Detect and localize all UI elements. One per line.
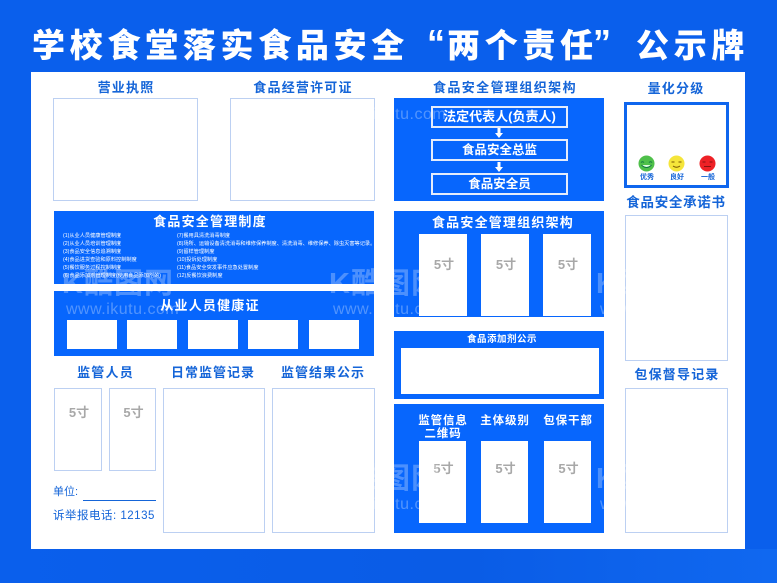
list: system items left: (2)从业人员培训管理制度 (63, 241, 121, 247)
title: “ (427, 22, 445, 63)
heading: health certificates: 从业人员健康证 (160, 298, 260, 313)
node: food safety officer: 食品安全员 (468, 177, 531, 191)
heading: food additives: 食品添加剂公示 (467, 334, 537, 345)
certificate slot 3 (188, 320, 238, 349)
list: system items right: (11)食品安全突发事件应急处置制度 (177, 265, 258, 271)
photo slot 1: 5寸 (433, 461, 454, 476)
watermark overlay: K酷图网 (329, 463, 441, 495)
certificate slot 5 (309, 320, 359, 349)
heading: organisation structure: 食品安全管理组织架构 (433, 80, 577, 95)
label: excellent: 优秀 (640, 174, 654, 181)
node: food safety officer (431, 173, 568, 195)
list: system items left: (5)餐饮服务过程控制制度 (63, 265, 121, 271)
icon: red face (700, 156, 716, 172)
panel: rating levels (624, 102, 729, 188)
heading: business licence: 营业执照 (98, 80, 154, 95)
watermark overlay: K酷图网 (596, 268, 708, 300)
list: system items right: (7)餐用具清洗消毒制度 (177, 233, 230, 239)
main white board (31, 72, 745, 549)
unit line (83, 500, 156, 501)
photo slot 2 (481, 441, 528, 523)
watermark overlay: K酷图网 (62, 268, 174, 300)
panel: health certificates (54, 291, 374, 356)
photo slot 2 (481, 234, 529, 316)
panel: supervision info (394, 404, 604, 533)
heading: food permit: 食品经营许可证 (253, 80, 353, 95)
node: food safety director (431, 139, 568, 161)
photo slot 3 (543, 234, 591, 316)
arrow: down (495, 128, 503, 138)
panel: management system (54, 211, 374, 284)
certificate slot 4 (248, 320, 298, 349)
heading: QR code: 二维码 (424, 428, 462, 440)
photo slot 3: 5寸 (558, 257, 578, 272)
box: food additives (401, 348, 599, 394)
list: system items right (177, 232, 374, 279)
label: general: 一般 (701, 174, 715, 181)
watermark overlay: www.ikutu.com (333, 301, 446, 318)
icon: green face (638, 156, 654, 172)
heading: entity level: 主体级别 (480, 415, 530, 427)
list: system items left: (3)食品安全信息追溯制度 (63, 249, 121, 255)
heading: supervisors: 监管人员 (77, 365, 134, 380)
panel: organisation chart (394, 98, 604, 201)
certificate slot 1 (67, 320, 117, 349)
certificate slot 2 (127, 320, 177, 349)
box: result notice (272, 388, 375, 533)
box: daily records (163, 388, 265, 533)
panel: food additives (394, 331, 604, 399)
box: food permit (230, 98, 375, 201)
heading: QR code: 监管信息 (418, 415, 468, 427)
title: 公示牌 (636, 19, 749, 67)
list: system items right: (10)投诉处理制度 (177, 257, 217, 263)
list: system items right: (8)场所、运输设备清洗消毒和维修保养制度、清洗消毒、维修保养、除虫灭害等记录。 (177, 241, 374, 247)
photo slot 2: 5寸 (495, 461, 516, 476)
list: system items left: (4)食品进货查验和原料控制制度 (63, 257, 137, 263)
watermark overlay: www.ikutu.com (66, 301, 179, 318)
label: good: 良好 (670, 174, 684, 181)
photo slot 2: 5寸 (496, 257, 516, 272)
watermark overlay: www.ikutu.com (333, 106, 446, 123)
watermark overlay: www.ikutu.com (600, 301, 713, 318)
title: ” (593, 22, 611, 63)
watermark overlay: www.ikutu.com (600, 496, 713, 513)
watermark overlay: K酷图网 (329, 268, 441, 300)
heading: rating: 量化分级 (648, 81, 704, 96)
photo slot 1 (419, 441, 466, 523)
heading: management system: 食品安全管理制度 (153, 214, 267, 229)
box: responsibility records (625, 388, 728, 533)
watermark overlay: www.ikutu.com (333, 496, 446, 513)
node: food safety director: 食品安全总监 (462, 143, 537, 157)
title: 两个责任 (447, 19, 598, 67)
heading: daily records: 日常监管记录 (171, 365, 255, 380)
title: 学校食堂落实食品安全 (32, 19, 409, 67)
heading: QR code (418, 414, 468, 440)
node: legal representative (431, 106, 568, 128)
label: unit: 单位: (53, 486, 78, 498)
photo slot 3: 5寸 (558, 461, 579, 476)
photo slot: supervisor 2: 5寸 (123, 405, 144, 420)
photo slot: supervisor 2 (109, 388, 156, 471)
list: system items left (63, 232, 161, 279)
photo slot 3 (544, 441, 591, 523)
list: system items left: (1)从业人员健康管理制度 (63, 233, 121, 239)
box: commitment letter (625, 215, 728, 361)
photo slot 1: 5寸 (434, 257, 454, 272)
list: system items right: (12)反餐饮浪费制度 (177, 273, 223, 279)
title (32, 19, 749, 67)
photo slot 1 (419, 234, 467, 316)
icon: yellow face (668, 156, 684, 172)
panel: organisation photos (394, 211, 604, 317)
heading: commitment letter: 食品安全承诺书 (626, 195, 726, 210)
list: system items right: (9)留样管理制度 (177, 249, 214, 255)
node: legal representative: 法定代表人(负责人) (443, 109, 556, 124)
photo slot: supervisor 1: 5寸 (69, 405, 89, 420)
watermark overlay: K酷图网 (596, 463, 708, 495)
heading: result notice: 监管结果公示 (281, 365, 365, 380)
heading: organisation photos: 食品安全管理组织架构 (432, 215, 574, 230)
list: system items left: (6)食品添加剂管理制度(使用食品添加剂的) (63, 273, 161, 279)
arrow: down (495, 162, 503, 172)
label: complaint hotline: 诉举报电话: 12135 (53, 510, 155, 522)
box: business licence (53, 98, 198, 201)
photo slot: supervisor 1 (54, 388, 102, 471)
heading: responsibility records: 包保督导记录 (634, 367, 720, 382)
heading: responsible cadre: 包保干部 (543, 415, 593, 427)
